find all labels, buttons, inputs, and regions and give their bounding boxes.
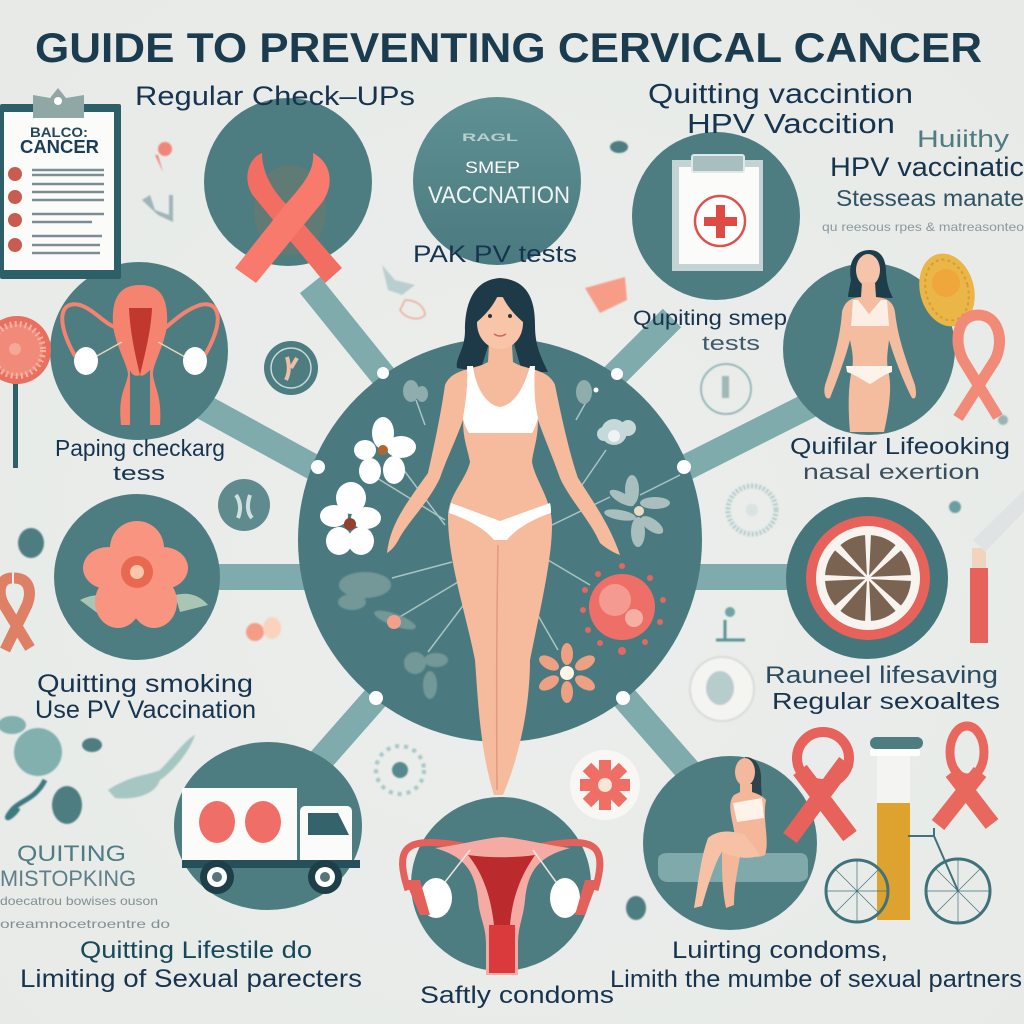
label: limiting condoms: Limith the mumbe of sexual partners [610, 966, 1022, 993]
red dots on clipboard [8, 167, 22, 252]
label: regular check-ups: Regular Check–UPs [135, 81, 415, 111]
flower stems [372, 395, 680, 652]
icon: uterus anatomy [403, 837, 600, 975]
icon: pink bud [387, 615, 401, 629]
panel: ribbon circle [204, 98, 372, 283]
panel: top centre circle: RAGL [462, 132, 518, 144]
panel: clipboard circle [632, 132, 800, 300]
icon: small badge middle left [218, 479, 270, 531]
panel: uterus bottom circle [403, 797, 600, 975]
label: paping checking tests: tess [113, 463, 165, 485]
icon: ring top right medium [701, 364, 751, 414]
label: healthy hpv vaccination: qu reesous rpes & matreasonteo [822, 220, 1024, 234]
label: quitting smear tests [633, 307, 787, 355]
icon: teal droplets [18, 141, 1008, 920]
icon: pale blossom right top [597, 419, 636, 445]
clipboard text lines [32, 170, 104, 253]
icon: medical clipboard [672, 155, 763, 271]
icon: bench [658, 853, 808, 882]
label: quitting smear tests: tests [702, 333, 760, 355]
panel: right woman circle [783, 247, 1000, 435]
panel: top centre circle [413, 97, 581, 265]
icon: magnifier [0, 316, 51, 468]
woman figure [387, 278, 620, 795]
icon: spiral faded [728, 486, 776, 534]
icon: bicycle [826, 828, 990, 923]
icon: virus spot [376, 746, 424, 794]
label: healthy hpv vaccination: Stesseas manate [836, 185, 1024, 211]
label: quitting smear tests: Qupiting smep [633, 307, 787, 330]
panel: top centre circle: VACCNATION [428, 182, 570, 209]
label: quitting vaccination: Quitting vaccintion [648, 78, 913, 109]
panel: uterus left circle [50, 262, 228, 440]
panel: truck circle [174, 742, 362, 910]
decorative small icons [0, 141, 1008, 920]
icon: truck [182, 788, 360, 894]
icon: teal sprig right [716, 620, 745, 640]
label: rational lifesaving: Rauneel lifesaving [765, 662, 998, 689]
icon: plate [690, 657, 754, 721]
label: quitting vaccination [648, 78, 913, 139]
panel: grapefruit circle [786, 497, 948, 659]
label: quitting lifestyle exercise: nasal exertion [803, 461, 980, 484]
panel: central circle with woman [298, 278, 702, 795]
panel: left clipboard [0, 88, 121, 279]
icon: coral heart-lobes top centre [585, 277, 627, 313]
label: quitting vaccination: HPV Vaccition [687, 108, 895, 139]
icon: brown slices [824, 534, 912, 622]
icon: white flower lower [320, 482, 381, 555]
panel: seated woman circle [643, 756, 817, 930]
icon: red tube [970, 490, 1024, 643]
label: paping checking tests [55, 435, 225, 485]
icon: small outlined lobe [400, 300, 425, 319]
icon: red ribbon left of tube [790, 732, 850, 838]
label: healthy hpv vaccination [822, 126, 1024, 234]
icon: coral sprig top left [155, 142, 172, 172]
icon: pale bird shape [108, 735, 195, 798]
label: quitting smoking: Quitting smoking [37, 670, 253, 698]
label: quitting lifestyle limiting [20, 937, 362, 993]
label: quitting smoking faded block: QUITING [17, 841, 126, 866]
icon: uterus diagram [62, 285, 218, 425]
icon: small badge left [264, 341, 318, 395]
icon: test tube [870, 737, 923, 920]
label: healthy hpv vaccination: Huiithy [917, 126, 1009, 153]
icon: small grey buds [403, 380, 598, 404]
icon: white flower upper [354, 417, 416, 484]
label: quitting lifestyle limiting: Limiting of Sexual parecters [20, 965, 362, 993]
icon: virus cell [580, 563, 666, 655]
label: rational lifesaving: Regular sexoaltes [772, 688, 1000, 714]
icon: gold medal [911, 247, 983, 333]
icon: teal curl lower left [7, 780, 45, 818]
icon: grey stand [142, 195, 173, 222]
woman small figure [824, 250, 916, 432]
icon: red ribbon [235, 153, 342, 283]
label: quitting smoking faded block: doecatrou bowises ouson [0, 894, 158, 908]
icon: pale grey flower right [603, 475, 670, 547]
label: pak pv tests: PAK PV tests [413, 241, 577, 268]
icon: red ribbon right of tube [938, 726, 992, 825]
icon: far left ribbon [0, 578, 30, 650]
label: quitting smoking faded block: oreamnocetroentre do [0, 917, 170, 931]
icon: teal dot lower [949, 501, 961, 513]
connector bands [200, 285, 810, 775]
icon: coral flower [80, 521, 208, 628]
label: healthy hpv vaccination: HPV vaccinatic [830, 152, 1024, 182]
dots [311, 367, 691, 705]
label: quitting lifestyle limiting: Quitting Lifestile do [80, 937, 312, 964]
icon: coral petals [246, 617, 281, 641]
label: quitting smoking [35, 670, 256, 724]
icon: orange flower [536, 643, 598, 703]
label: quitting smoking faded block: MISTOPKING [0, 866, 136, 891]
label: quitting smoking: Use PV Vaccination [35, 696, 256, 724]
title: GUIDE TO PREVENTING CERVICAL CANCER [35, 24, 982, 71]
label: quitting lifestyle exercise: Quifilar Lifeooking [790, 433, 1010, 459]
label: limiting condoms [610, 937, 1022, 993]
label: rational lifesaving [765, 662, 1000, 714]
icon: white disc flower [570, 750, 640, 820]
label: quitting smoking faded block [0, 841, 170, 931]
panel: flower left circle [54, 494, 220, 660]
label: safety condoms: Saftly condoms [420, 982, 614, 1009]
seated woman [694, 757, 767, 908]
panel: top centre circle: SMEP [465, 158, 520, 177]
panel: left clipboard: CANCER [20, 137, 99, 157]
icon: coral ribbon right [958, 315, 1000, 418]
panel: left clipboard: BALCO: [30, 124, 88, 140]
icon: faded flowers lower left [338, 572, 448, 699]
label: paping checking tests: Paping checkarg [55, 435, 225, 461]
label: limiting condoms: Luirting condoms, [672, 937, 888, 964]
label: quitting lifestyle exercise [790, 433, 1010, 484]
